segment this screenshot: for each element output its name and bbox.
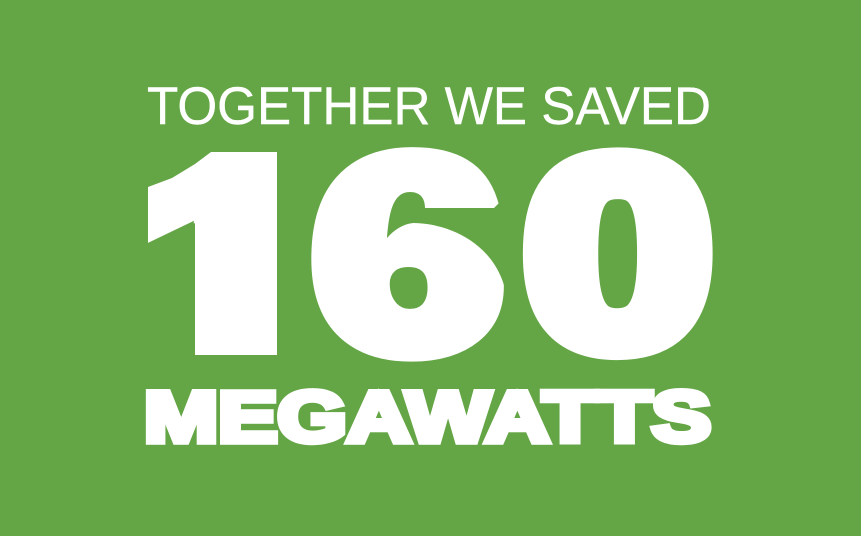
big number: 160: 0	[524, 103, 712, 403]
heading: together we saved: TOGETHER WE SAVED	[147, 77, 711, 136]
big number: 160: 1	[122, 102, 332, 426]
unit label: megawatts: MEGAWATTS	[144, 378, 711, 458]
big number: 160	[148, 147, 713, 362]
infographic panel	[146, 86, 713, 446]
big number: 160: 6	[314, 104, 501, 405]
